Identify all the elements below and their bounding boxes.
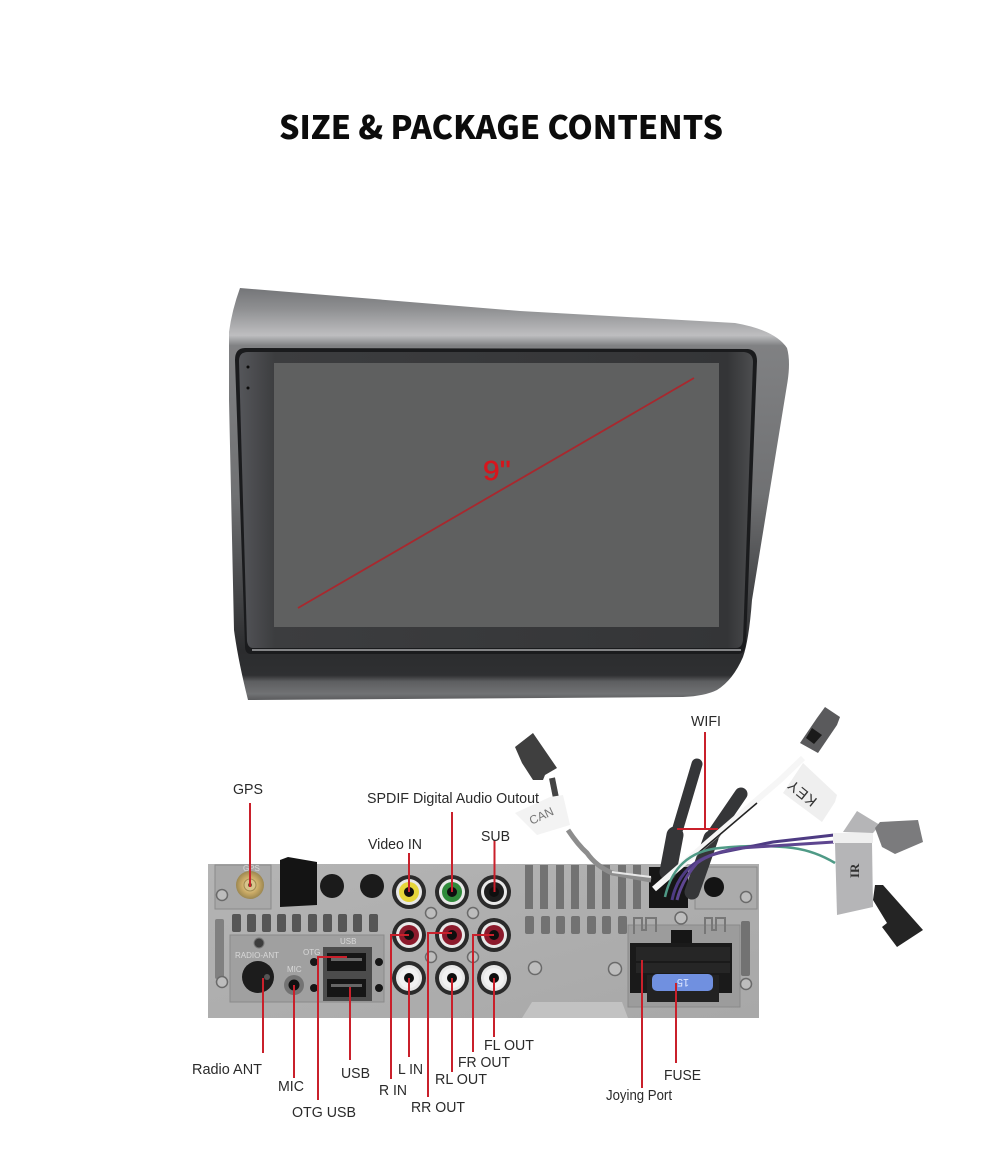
icon: mic socket: [284, 975, 304, 995]
bezel outer shell: [229, 288, 789, 700]
port labels: Radio ANT: [192, 1062, 262, 1078]
port labels: FUSE: [664, 1068, 701, 1084]
KEY tag: [783, 763, 837, 822]
panel print labels: OTG: [303, 948, 320, 957]
panel: rear of head unit: [208, 857, 759, 1018]
port labels: SUB: [481, 829, 510, 845]
IR plug top: [875, 820, 923, 854]
icon: black power block: [280, 857, 317, 907]
icon: IR cable: [665, 811, 923, 947]
callout lines: [250, 732, 718, 1100]
icon: GPS connector: [236, 871, 264, 899]
title: SIZE & PACKAGE CONTENTS: [279, 103, 723, 149]
diagonal size line: [298, 378, 694, 608]
icon: blue fuse: 15: [677, 976, 689, 988]
icon: radio antenna socket: [242, 938, 274, 993]
CAN tag: CAN: [527, 804, 556, 828]
port labels: WIFI: [691, 714, 721, 730]
panel print labels: USB: [340, 937, 356, 946]
icon: blanking plugs: [320, 874, 384, 898]
icon: WIFI antenna tubes: [668, 764, 741, 892]
camera dots: [246, 366, 250, 390]
port labels: Joying Port: [606, 1088, 672, 1104]
icon: main harness connector: [630, 930, 732, 1002]
port labels: USB: [341, 1066, 370, 1082]
panel: head unit front with screen: [229, 288, 789, 700]
port labels: R IN: [379, 1083, 407, 1099]
screws: [216, 890, 752, 990]
glass frame: [235, 348, 757, 654]
bottom lip: [522, 1002, 628, 1018]
CAN connector plug: [515, 733, 557, 780]
icon: KEY cable: KEY: [784, 776, 820, 810]
port labels: L IN: [398, 1062, 423, 1078]
ventilation fins right: [525, 865, 750, 976]
panel print labels: GPS: [243, 864, 260, 873]
icon: blue fuse: [652, 974, 713, 991]
port labels: Video IN: [368, 837, 422, 853]
port labels: FR OUT: [458, 1055, 510, 1071]
port labels: OTG USB: [292, 1105, 356, 1121]
icon: black wiring socket: [649, 867, 688, 908]
panel print labels: MIC: [287, 965, 302, 974]
port labels: [192, 714, 721, 1121]
glass: [239, 352, 753, 648]
icon: rear knob: [704, 877, 724, 897]
size label: 9'': [483, 455, 511, 486]
small holes: [310, 958, 383, 992]
port labels: SPDIF Digital Audio Outout: [367, 791, 539, 807]
icon: KEY cable: [654, 707, 840, 889]
port labels: GPS: [233, 782, 263, 798]
rear plate recesses: [215, 865, 757, 1007]
port labels: RR OUT: [411, 1100, 465, 1116]
ventilation slots left: [215, 914, 378, 979]
port labels: MIC: [278, 1079, 304, 1095]
IR tag: IR: [847, 863, 862, 878]
icon: USB ports: [323, 947, 372, 1001]
port labels: FL OUT: [484, 1038, 534, 1054]
port labels: RL OUT: [435, 1072, 487, 1088]
IR plug bottom: [873, 885, 923, 947]
RCA sockets: [392, 875, 511, 995]
screen area: [274, 363, 719, 627]
panel print labels: RADIO-ANT: [235, 951, 279, 960]
icon: CAN cable: [515, 733, 651, 880]
panel print labels: [235, 864, 356, 974]
